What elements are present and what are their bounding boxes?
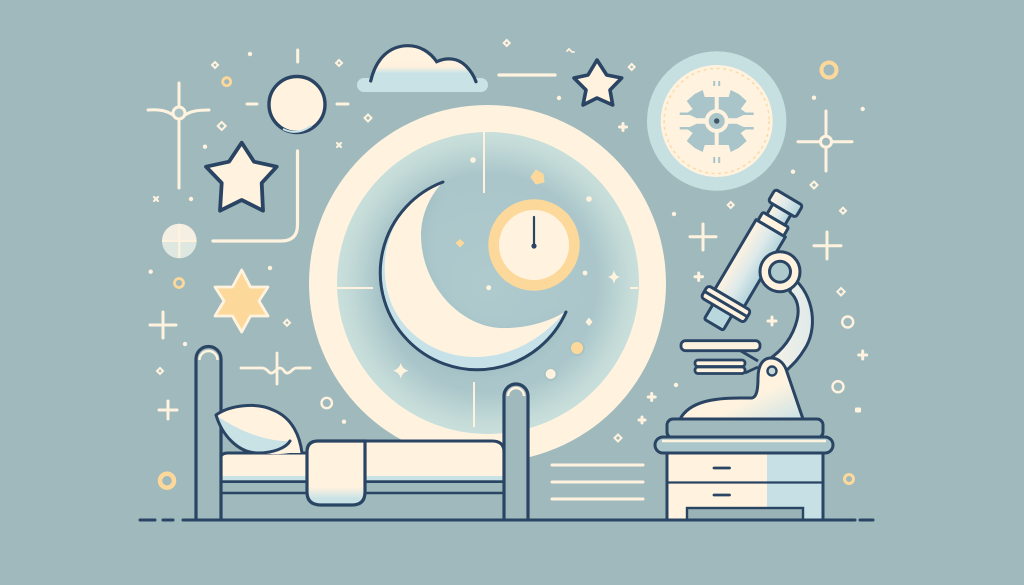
short side dashes bbox=[300, 366, 310, 370]
crescent moon bbox=[380, 182, 566, 374]
pivot knob bbox=[768, 366, 776, 376]
cross star top right bbox=[798, 111, 852, 171]
cloud bbox=[357, 46, 488, 92]
compass dial bbox=[647, 51, 786, 191]
blanket bbox=[307, 441, 365, 505]
pedestal top bbox=[667, 419, 823, 438]
pillow bbox=[216, 405, 302, 454]
large outlined star bbox=[206, 143, 277, 211]
clock bbox=[488, 199, 580, 291]
small outlined star bbox=[574, 60, 622, 105]
three text-like lines bbox=[552, 465, 643, 499]
stage plates bbox=[681, 341, 760, 374]
horizontal dash near cloud bbox=[499, 73, 555, 77]
microscope foot bbox=[680, 358, 803, 419]
bed rails bbox=[220, 482, 504, 493]
cross star top left bbox=[148, 83, 209, 188]
post highlights bbox=[200, 351, 524, 396]
bed mattress bbox=[220, 441, 504, 480]
sparkles inside circle bbox=[393, 157, 620, 381]
plus marks bbox=[150, 49, 867, 423]
cabinet bbox=[667, 453, 823, 520]
cream rings bbox=[322, 316, 853, 408]
microscope bbox=[655, 185, 833, 520]
six pointed star bbox=[215, 270, 268, 332]
yellow rings bbox=[160, 62, 854, 488]
planet circle bbox=[247, 50, 348, 132]
right bed post bbox=[504, 384, 528, 520]
focus wheel bbox=[760, 252, 800, 292]
tube bbox=[692, 185, 811, 337]
pale quartered circle bbox=[162, 224, 197, 258]
bed bbox=[196, 346, 528, 520]
big glowing circle bbox=[309, 105, 666, 462]
pedestal slab bbox=[655, 437, 833, 453]
corner line bbox=[213, 151, 298, 241]
small dots bbox=[148, 52, 865, 424]
left bed post bbox=[196, 346, 221, 520]
ground line bbox=[140, 518, 873, 522]
arm bbox=[768, 277, 812, 371]
small ring diamonds bbox=[157, 40, 846, 442]
heartbeat line bbox=[241, 353, 309, 384]
